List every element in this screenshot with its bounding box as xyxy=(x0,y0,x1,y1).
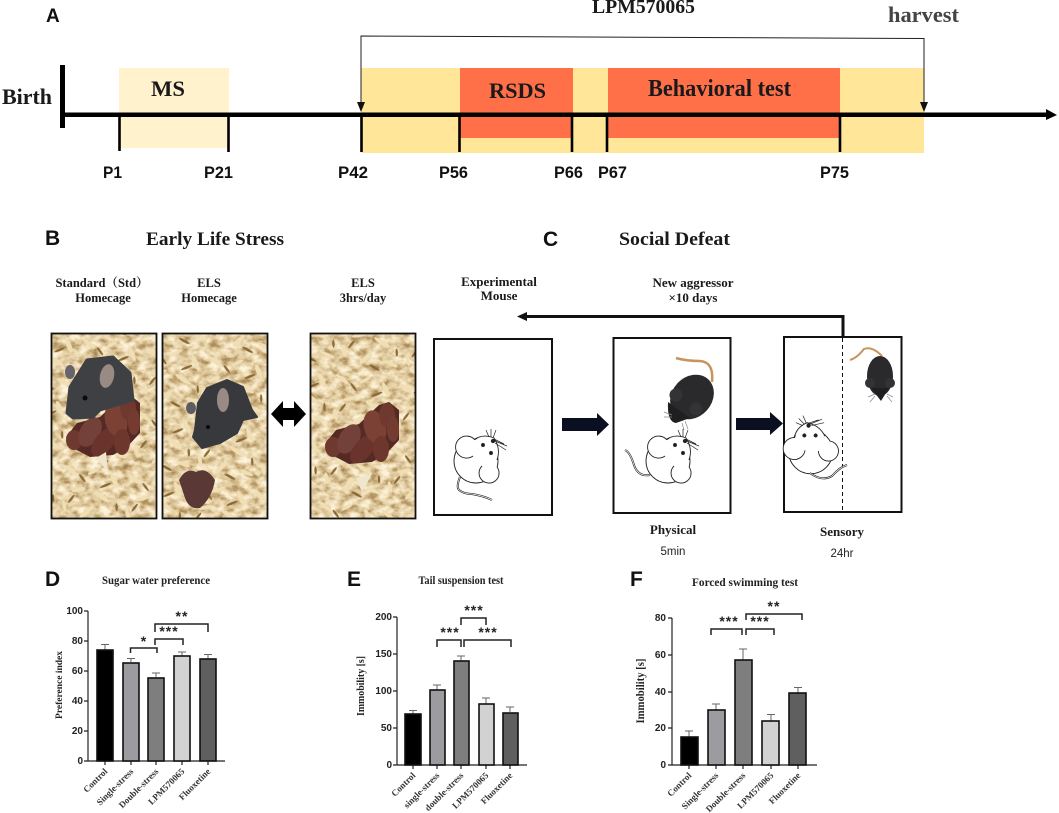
return arrow: new aggressor xyxy=(526,316,843,336)
durations: 24hr xyxy=(830,548,854,560)
x axis labels: Control xyxy=(81,766,110,795)
captions B: Homecage xyxy=(181,291,237,305)
significance stars: ** xyxy=(176,608,188,624)
bar chart F xyxy=(635,598,817,813)
cage: experimental mouse xyxy=(434,339,552,515)
y axis numbers: 50 xyxy=(381,723,392,734)
panel F: forced swimming test xyxy=(630,568,817,813)
significance stars xyxy=(440,602,498,640)
panel B: early life stress xyxy=(45,227,416,518)
heading B: Early Life Stress xyxy=(146,229,284,250)
captions C: Physical xyxy=(650,522,696,537)
birth bar xyxy=(60,65,65,128)
y axis numbers xyxy=(66,606,83,767)
postnatal day labels xyxy=(103,163,849,182)
y axis numbers: 20 xyxy=(72,726,83,737)
postnatal day labels: P21 xyxy=(204,163,233,182)
y axis numbers: 80 xyxy=(72,636,83,647)
significance stars xyxy=(719,598,780,629)
bars xyxy=(681,737,698,765)
significance stars: *** xyxy=(464,602,484,618)
postnatal day labels: P67 xyxy=(598,163,627,182)
durations xyxy=(661,546,854,560)
label B: B xyxy=(45,227,60,250)
significance brackets xyxy=(130,624,208,653)
x axis labels: Fluoxetine xyxy=(177,766,212,802)
error bars xyxy=(101,644,212,677)
significance stars: ** xyxy=(768,598,780,614)
postnatal day labels: P66 xyxy=(554,163,583,182)
x axis labels: Double-stress xyxy=(117,766,161,810)
x axis labels: Double-stress xyxy=(704,770,748,813)
captions B xyxy=(55,276,387,305)
tick marks xyxy=(120,115,840,152)
y axis numbers xyxy=(655,613,666,771)
captions C: Sensory xyxy=(820,524,865,539)
bracket arrowhead right xyxy=(920,102,928,112)
y axis title: Immobility [s] xyxy=(355,656,367,716)
panel C: social defeat xyxy=(434,228,902,560)
timeline arrow xyxy=(62,109,1057,120)
MS period band xyxy=(119,68,229,148)
x axis labels xyxy=(389,770,514,813)
photo: ELS homecage xyxy=(162,334,268,518)
y axis numbers: 60 xyxy=(655,650,666,661)
postnatal day labels: P1 xyxy=(103,163,122,182)
y axis numbers: 20 xyxy=(655,723,666,734)
heading C: Social Defeat xyxy=(619,229,731,250)
x axis labels: Control xyxy=(389,770,418,799)
cage: physical contact xyxy=(614,338,730,513)
significance stars: *** xyxy=(440,624,460,640)
y axis numbers: 150 xyxy=(375,649,392,660)
significance stars: * xyxy=(141,633,147,649)
y axis numbers: 200 xyxy=(375,612,392,623)
significance brackets xyxy=(437,618,511,647)
label C: C xyxy=(543,228,558,251)
captions B: ELS xyxy=(197,276,221,290)
bars xyxy=(97,650,113,761)
error bars xyxy=(409,656,514,714)
postnatal day labels: P42 xyxy=(338,163,368,182)
captions C xyxy=(461,274,865,539)
x axis labels: Single-stress xyxy=(680,770,721,811)
y axis numbers: 0 xyxy=(660,760,666,771)
bars xyxy=(405,714,421,765)
timeline labels: Behavioral test xyxy=(648,76,791,102)
significance stars xyxy=(141,608,188,649)
timeline labels: Birth xyxy=(2,84,52,109)
return arrowhead xyxy=(517,312,527,321)
label A: A xyxy=(46,6,60,27)
y axis title: Preference index xyxy=(55,651,65,719)
significance stars: *** xyxy=(719,613,739,629)
RSDS band xyxy=(460,68,573,138)
captions C: Experimental xyxy=(461,274,537,289)
panel D: sugar water preference xyxy=(45,568,225,810)
captions C: Mouse xyxy=(481,288,518,303)
label E: E xyxy=(347,568,361,591)
label D: D xyxy=(45,568,60,591)
y axis numbers: 40 xyxy=(72,696,83,707)
x axis labels: single-stress xyxy=(402,770,442,810)
label F: F xyxy=(630,568,643,591)
block arrow 1 xyxy=(562,413,609,436)
y axis numbers: 100 xyxy=(66,606,83,617)
captions B: Homecage xyxy=(75,291,131,305)
icon: double-headed arrow xyxy=(271,401,306,427)
postnatal day labels: P75 xyxy=(820,163,849,182)
x axis labels: Fluoxetine xyxy=(767,770,802,806)
error bars xyxy=(685,649,802,737)
y axis numbers: 60 xyxy=(72,666,83,677)
photo: ELS 3 hrs/day xyxy=(310,334,416,518)
x axis labels: Control xyxy=(665,770,694,799)
heading F: Forced swimming test xyxy=(692,577,798,589)
panel A: timeline xyxy=(2,0,1057,182)
x axis labels: Fluoxetine xyxy=(479,770,514,806)
captions C: New aggressor xyxy=(652,275,734,290)
durations: 5min xyxy=(661,546,685,558)
cage: sensory contact xyxy=(773,337,902,512)
timeline labels xyxy=(2,0,960,109)
y axis numbers: 0 xyxy=(77,756,83,767)
heading D: Sugar water preference xyxy=(102,575,210,587)
significance brackets xyxy=(711,614,802,635)
y axis numbers: 0 xyxy=(386,760,392,771)
y axis numbers xyxy=(375,612,392,771)
x axis labels xyxy=(665,770,802,813)
LPM570065 treatment band xyxy=(361,68,924,153)
timeline labels: harvest xyxy=(888,2,960,27)
captions B: 3hrs/day xyxy=(340,291,387,305)
x axis labels: LPM570065 xyxy=(450,770,491,811)
significance stars: *** xyxy=(478,624,498,640)
significance stars: *** xyxy=(159,623,179,639)
y axis numbers: 40 xyxy=(655,687,666,698)
timeline labels: RSDS xyxy=(489,78,546,103)
y axis numbers: 80 xyxy=(655,613,666,624)
treatment bracket xyxy=(361,36,924,110)
captions C: ×10 days xyxy=(669,290,717,305)
timeline labels: MS xyxy=(151,76,185,101)
y axis numbers: 100 xyxy=(375,686,392,697)
x axis labels: double-stress xyxy=(423,770,466,813)
bracket arrowhead left xyxy=(357,102,365,112)
x axis labels: Single-stress xyxy=(95,766,136,807)
captions B: Standard（Std） xyxy=(55,276,149,290)
x axis labels xyxy=(81,766,212,810)
bar chart E xyxy=(355,602,527,813)
bar chart D xyxy=(55,606,225,810)
x axis labels: LPM570065 xyxy=(146,766,187,807)
panel E: tail suspension test xyxy=(347,568,527,813)
y axis title: Immobility [s] xyxy=(635,658,647,724)
significance stars: *** xyxy=(750,613,770,629)
captions B: ELS xyxy=(351,276,375,290)
x axis labels: LPM570065 xyxy=(735,770,776,811)
photo: standard homecage xyxy=(52,334,156,518)
block arrow 2 xyxy=(736,412,783,435)
postnatal day labels: P56 xyxy=(439,163,468,182)
behavioral test band xyxy=(608,68,840,138)
heading E: Tail suspension test xyxy=(418,575,504,587)
